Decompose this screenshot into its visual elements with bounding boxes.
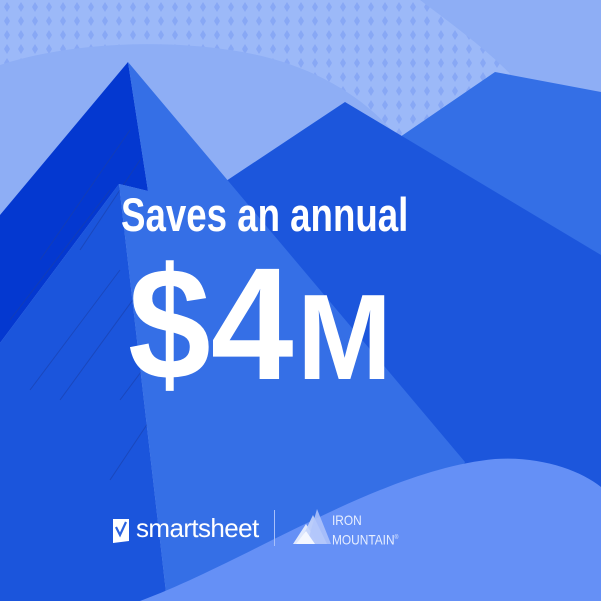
logo: iron mountain xyxy=(293,509,398,548)
bottom hill xyxy=(140,459,601,601)
right back mountain xyxy=(400,72,601,601)
big number: $4M xyxy=(128,234,392,413)
logo: iron mountain: MOUNTAIN® xyxy=(332,532,398,548)
left mountain mid face xyxy=(0,184,167,601)
logo: iron mountain: IRON xyxy=(332,512,362,528)
icon: smartsheet xyxy=(113,519,129,543)
left mountain light face xyxy=(119,62,465,601)
left mountain dark face xyxy=(0,62,148,343)
headline: Saves an annual xyxy=(121,188,408,241)
hatch lines xyxy=(10,130,150,480)
middle mountain xyxy=(208,102,601,601)
divider xyxy=(274,510,275,546)
logo: smartsheet: smartsheet xyxy=(136,513,259,543)
